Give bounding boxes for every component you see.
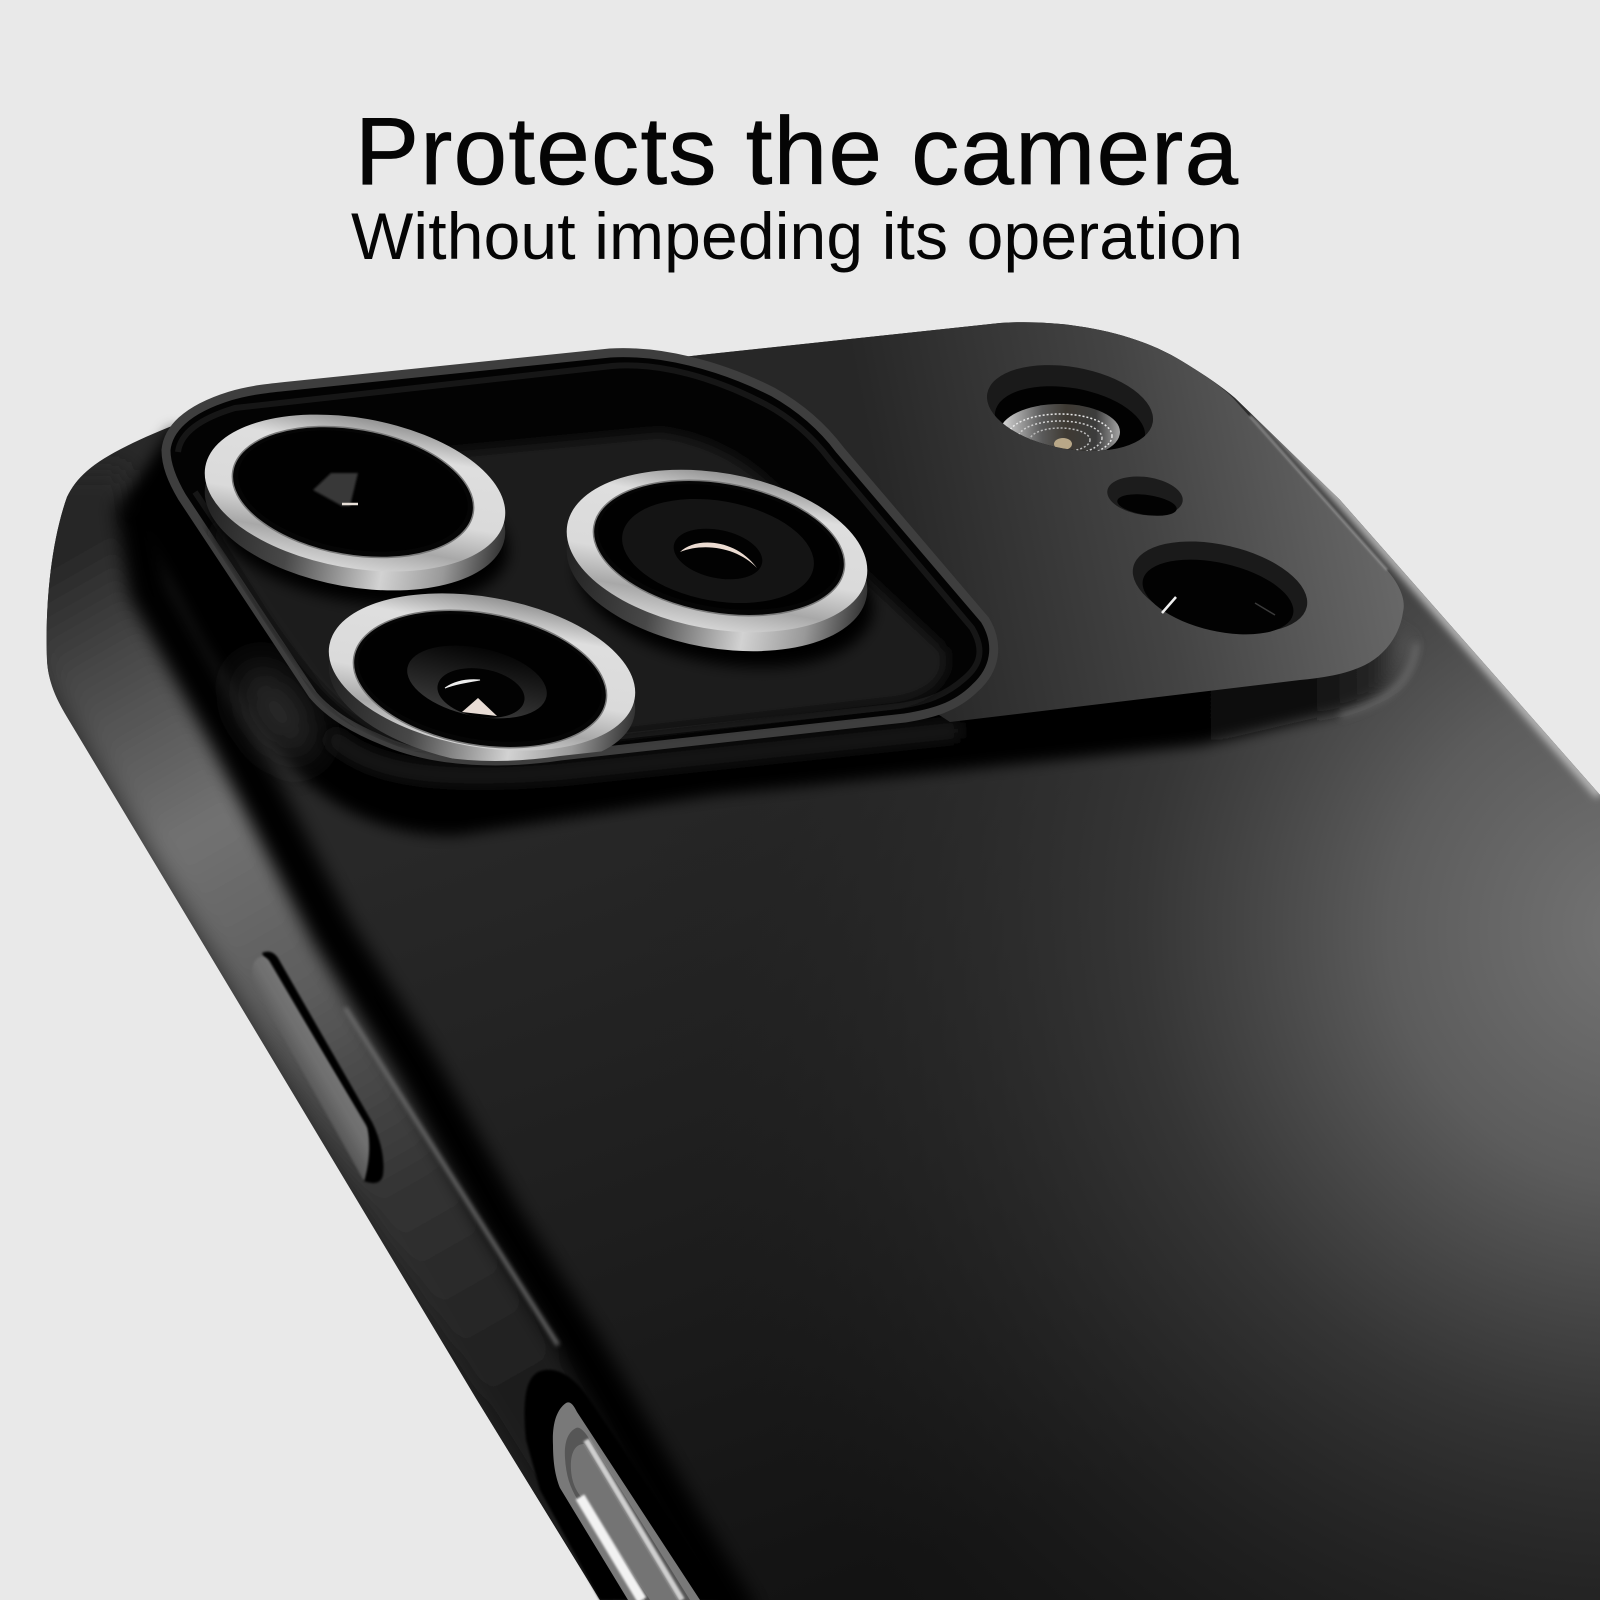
port slot (565, 1428, 690, 1600)
camera well (166, 353, 994, 789)
island corner ridge highlight (1340, 643, 1417, 716)
port plate (553, 1402, 700, 1600)
lens 3 highlights (462, 698, 497, 716)
island lower left soft light (225, 652, 331, 772)
port recess (524, 1370, 725, 1600)
right edge highlight (1260, 412, 1600, 795)
subtitle: Without impeding its operation (351, 199, 1243, 273)
case body (46, 322, 1600, 1600)
well rim and black wall (166, 353, 994, 761)
plate edge highlight (1250, 416, 1387, 570)
side face band (46, 460, 600, 1600)
side button (252, 952, 384, 1183)
shadow band under camera island (125, 430, 1412, 835)
lens 2 (566, 470, 876, 670)
lens 1 inner cone (313, 473, 358, 506)
groove beside side face (135, 500, 740, 1600)
lower sensor opening (1124, 526, 1316, 648)
island lower soft band (330, 730, 960, 776)
flash metal reflector (1003, 404, 1120, 451)
phone with case (46, 322, 1600, 1600)
title: Protects the camera (355, 98, 1239, 205)
lens 3 (328, 593, 636, 761)
well floor (210, 432, 946, 745)
lens 3 cone (407, 646, 547, 718)
lens 2 glass (622, 499, 814, 603)
flash opening (987, 365, 1153, 451)
lens 2 highlight (680, 543, 757, 568)
charging port (524, 1370, 725, 1600)
port highlights (580, 1497, 642, 1600)
camera plate (682, 322, 1404, 722)
lens 1 (204, 414, 511, 607)
side ridge highlight (345, 1008, 558, 1345)
microphone hole (1105, 472, 1185, 520)
rim inner bevel (178, 365, 979, 748)
